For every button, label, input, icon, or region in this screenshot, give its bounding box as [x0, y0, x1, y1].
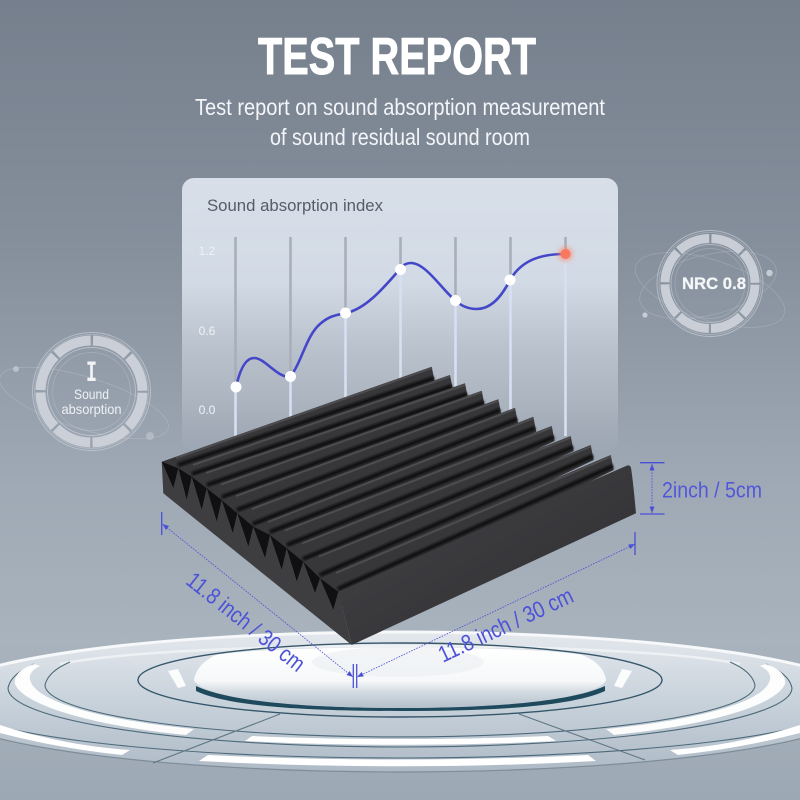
badge label: [62, 386, 122, 417]
chart heading: Sound absorption index: [207, 196, 383, 215]
y axis labels: [199, 244, 216, 417]
dimension: left depth: 11.8 inch / 30 cm: [182, 567, 310, 677]
y axis labels: 0.0: [199, 403, 216, 417]
y axis labels: 1.2: [199, 244, 216, 258]
dimension: height: 2inch / 5cm: [662, 478, 762, 502]
platform body: [194, 648, 606, 708]
highlighted end point: [558, 247, 572, 261]
badge label: Sound: [74, 386, 109, 402]
badge label: NRC 0.8: [682, 274, 746, 293]
badge: sound absorption: [0, 332, 176, 454]
circular platform: [0, 632, 800, 772]
wedge faces: [162, 367, 614, 610]
dimension: right width: [357, 532, 635, 688]
subtitle: of sound residual sound room: [270, 124, 530, 150]
badge: NRC 0.8: [627, 230, 793, 343]
side zigzag profile: [162, 462, 352, 645]
title: TEST REPORT: [258, 28, 536, 86]
second rim highlight: [60, 646, 740, 664]
badge label: absorption: [62, 401, 122, 417]
dimension: height: [640, 463, 762, 514]
chart grid columns: [236, 237, 566, 440]
dimension: right width: 11.8 inch / 30 cm: [434, 582, 577, 667]
foam panel: [162, 367, 636, 645]
platform shadow: [196, 686, 605, 711]
light strips: [0, 664, 800, 766]
ring lines: [0, 643, 800, 763]
dimension: left depth: [162, 512, 353, 688]
data points: [230, 264, 516, 392]
subtitle: [195, 94, 606, 150]
y axis labels: 0.6: [199, 324, 216, 338]
end notches: [162, 462, 338, 610]
outer rim: [0, 632, 800, 702]
panel: sound absorption index chart: [182, 178, 618, 450]
subtitle: Test report on sound absorption measurement: [195, 94, 606, 120]
icon: I beam: I: [86, 357, 97, 391]
front wedge: [338, 465, 636, 645]
line curve: [236, 254, 565, 387]
